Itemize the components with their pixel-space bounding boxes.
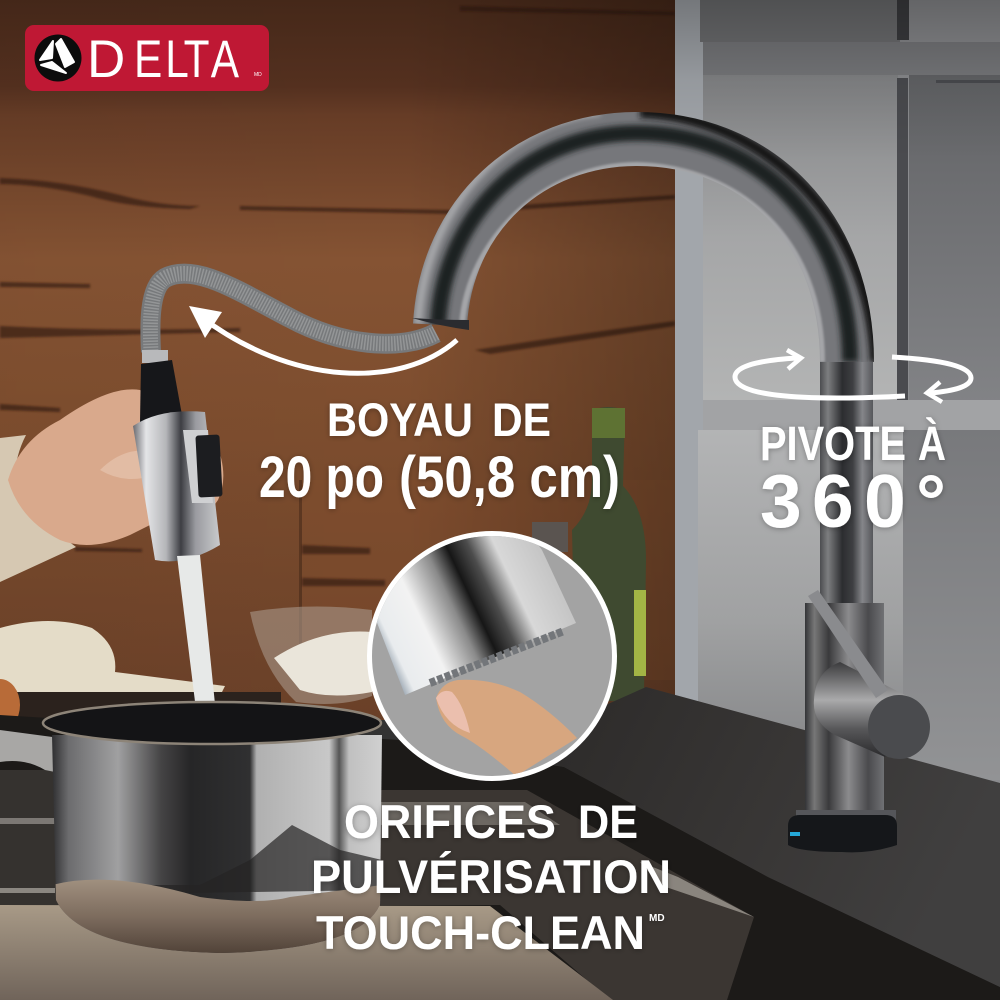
label: hose length: 20 po <box>259 445 384 510</box>
label: Touch-Clean spray holes: TOUCH-CLEAN <box>316 906 645 959</box>
label: 360 swivel: PIVOTE <box>760 418 906 471</box>
faucet: arched spout <box>418 112 876 362</box>
background: wine bottle <box>532 407 646 701</box>
logo icon <box>34 34 82 82</box>
hose <box>150 274 436 352</box>
label: Touch-Clean spray holes: MD <box>649 913 665 924</box>
label: 360 swivel: À <box>918 417 946 471</box>
sweater sleeve <box>0 435 76 582</box>
hand holding spray head <box>8 389 223 545</box>
sink basin <box>0 715 1000 1000</box>
label: hose length: BOYAU <box>327 393 473 446</box>
background: dough on table <box>0 621 281 731</box>
logo: Delta badge: ELTA <box>134 31 239 89</box>
background: countertop and sink <box>0 687 1000 1000</box>
logo wordmark: D <box>87 30 129 89</box>
cooking pot <box>0 702 382 955</box>
label: 360 swivel <box>760 417 946 543</box>
background: wood wall <box>0 0 678 720</box>
faucet: handle <box>808 590 930 759</box>
faucet: spout tip <box>412 318 469 330</box>
background: grey cabinets <box>675 0 1000 800</box>
pot body <box>52 735 382 955</box>
faucet: body column <box>788 340 897 852</box>
inset spray nozzle <box>377 536 576 695</box>
arrow: hose length <box>189 306 457 373</box>
label: hose length: DE <box>492 393 551 446</box>
logo: Delta badge: MD <box>254 72 262 78</box>
label: Touch-Clean spray holes: ORIFICES <box>344 795 556 848</box>
label: 360 swivel: 360° <box>760 459 946 543</box>
logo: Delta badge <box>25 25 269 91</box>
pot handle <box>0 730 118 808</box>
background: glass bowl with flour <box>250 606 372 704</box>
spray head <box>133 350 223 561</box>
pot rim <box>43 702 381 744</box>
label: Touch-Clean spray holes: PULVÉRISATION <box>311 850 671 903</box>
arrows: 360 degree rotation <box>735 350 971 402</box>
label: hose length <box>259 393 620 510</box>
inset finger <box>436 680 577 776</box>
inset spray holes <box>430 631 564 683</box>
label: Touch-Clean spray holes <box>311 795 671 959</box>
cutting board <box>0 905 613 1000</box>
label: Touch-Clean spray holes: DE <box>578 795 638 848</box>
circular inset: spray holes <box>367 520 617 781</box>
countertop surface <box>500 687 1000 987</box>
water stream <box>177 555 218 734</box>
inset fingernail <box>436 691 470 733</box>
label: hose length: (50,8 cm) <box>399 445 620 510</box>
